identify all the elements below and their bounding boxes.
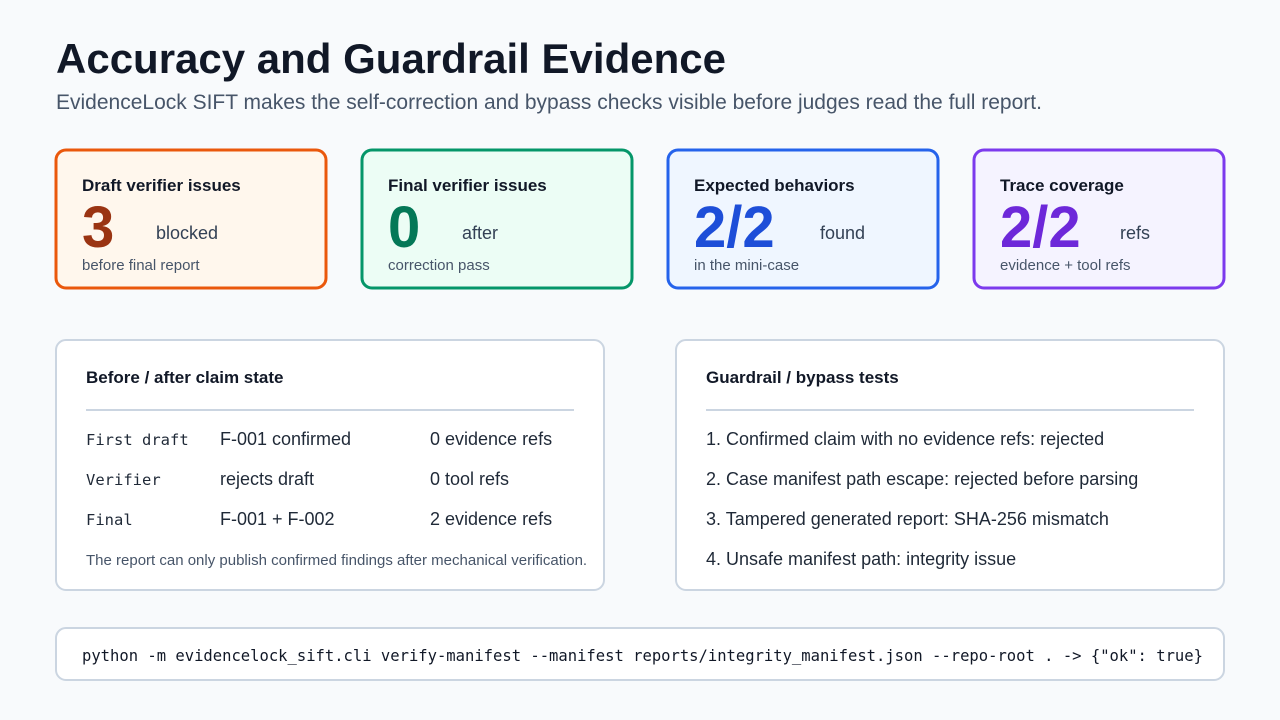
row: final: 2 evidence refs — [430, 509, 552, 529]
row: first draft: 0 evidence refs — [430, 429, 552, 449]
panel: guardrail / bypass tests: Guardrail / bypass tests — [706, 368, 899, 387]
panel: expected behaviors: in the mini-case — [694, 257, 799, 274]
panel: draft verifier issues: Draft verifier issues — [82, 176, 241, 195]
panel: draft verifier issues: before final report — [82, 257, 200, 274]
test 2: 2. Case manifest path escape: rejected before parsing — [706, 469, 1138, 489]
panel: expected behaviors: found — [820, 223, 865, 243]
note: The report can only publish confirmed findings after mechanical verification. — [86, 552, 587, 569]
row: first draft — [86, 429, 552, 449]
row: first draft: First draft — [86, 431, 189, 449]
panel: draft verifier issues: blocked — [156, 223, 218, 243]
command bar — [56, 628, 1224, 680]
row: first draft: F-001 confirmed — [220, 429, 351, 449]
panel: trace coverage — [974, 150, 1224, 288]
row: final — [86, 509, 552, 529]
panel: trace coverage: evidence + tool refs — [1000, 257, 1130, 274]
row: verifier: 0 tool refs — [430, 469, 509, 489]
panel: expected behaviors — [668, 150, 938, 288]
panel: before / after claim state — [56, 340, 604, 590]
panel: trace coverage: 2/2 — [1000, 195, 1081, 260]
row: final: F-001 + F-002 — [220, 509, 335, 529]
panel: before / after claim state: Before / after claim state — [86, 368, 283, 387]
row: verifier — [86, 469, 509, 489]
panel: expected behaviors: Expected behaviors — [694, 176, 855, 195]
row: verifier: rejects draft — [220, 469, 314, 489]
row: final: Final — [86, 511, 133, 529]
title: Accuracy and Guardrail Evidence — [56, 35, 726, 82]
command bar: python -m evidencelock_sift.cli verify-manifest --manifest reports/integrity_manifest.json --repo-root . -> {"ok": true} — [82, 647, 1203, 665]
panel: final verifier issues: correction pass — [388, 257, 490, 274]
panel: trace coverage: Trace coverage — [1000, 176, 1124, 195]
panel: draft verifier issues: 3 — [82, 195, 114, 260]
subtitle: EvidenceLock SIFT makes the self-correction and bypass checks visible before judges read the full report. — [56, 91, 1042, 114]
panel: final verifier issues — [362, 150, 632, 288]
panel: final verifier issues: Final verifier issues — [388, 176, 547, 195]
row: verifier: Verifier — [86, 471, 161, 489]
panel: draft verifier issues — [56, 150, 326, 288]
test 1: 1. Confirmed claim with no evidence refs: rejected — [706, 429, 1104, 449]
panel: expected behaviors: 2/2 — [694, 195, 775, 260]
test 3: 3. Tampered generated report: SHA-256 mismatch — [706, 509, 1109, 529]
panel: trace coverage: refs — [1120, 223, 1150, 243]
panel: guardrail / bypass tests — [676, 340, 1224, 590]
test 4: 4. Unsafe manifest path: integrity issue — [706, 549, 1016, 569]
panel: final verifier issues: after — [462, 223, 498, 243]
panel: final verifier issues: 0 — [388, 195, 420, 260]
